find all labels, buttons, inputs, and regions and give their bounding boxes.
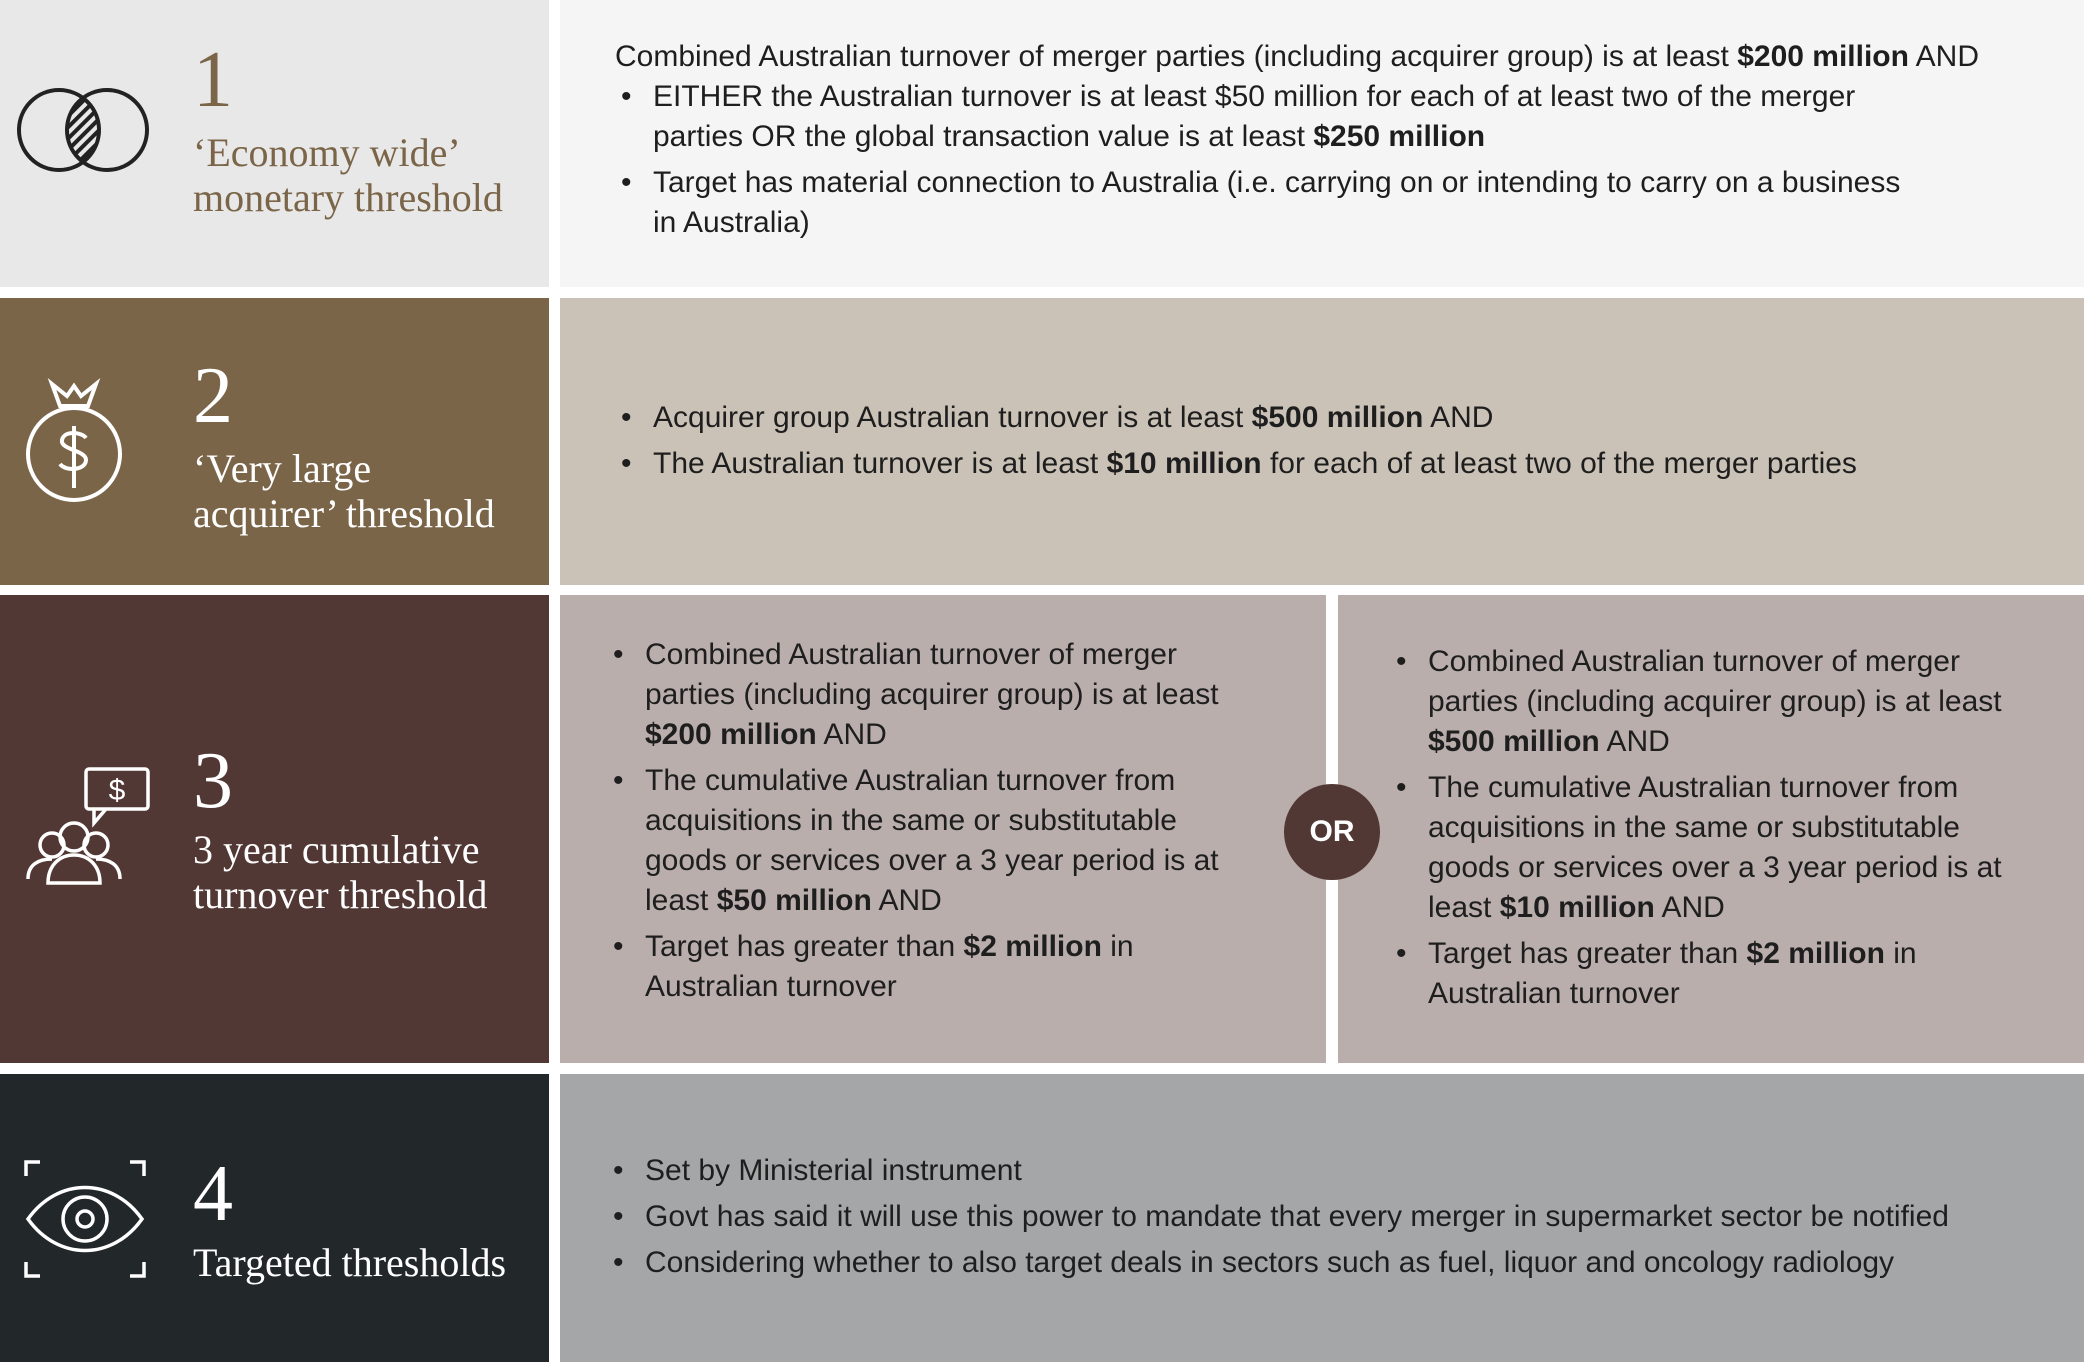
panel: row 4 right — [560, 1074, 2084, 1362]
text: row 4 points — [614, 1154, 1949, 1279]
text: row 2 criteria: The Australian turnover is at least $10 million for each of at least two of the merger parties — [653, 447, 1857, 480]
number 2: 2 — [193, 352, 233, 440]
text: option A criteria — [614, 638, 1219, 1003]
panel: row 1 left — [0, 0, 549, 287]
text: row 4 points: Considering whether to also target deals in sectors such as fuel, liquor and oncology radiology — [645, 1246, 1894, 1279]
heading 3: 3 year cumulative — [193, 827, 480, 872]
heading 4: Targeted thresholds — [193, 1240, 506, 1285]
icon: eye in frame — [24, 1160, 146, 1278]
text: option A criteria: The cumulative Australian turnover from acquisitions in the same or substitutable goods or services over a 3 year period is at least $50 million AND — [645, 764, 1219, 917]
text: row 1 criteria: EITHER the Australian turnover is at least $50 million for each of at least two of the merger parties OR the global transaction value is at least $250 million — [653, 80, 1855, 153]
text: option B criteria — [1397, 645, 2002, 1010]
text: row 1 criteria: Target has material connection to Australia (i.e. carrying on or intending to carry on a business in Australia) — [653, 166, 1900, 239]
heading 3 — [193, 827, 487, 917]
panel: row 3 left — [0, 595, 549, 1063]
panel: row 3 option B — [1338, 595, 2084, 1063]
text: row 1 criteria: Combined Australian turnover of merger parties (including acquirer group) is at least $200 million AND — [615, 40, 1979, 73]
panel: row 4 left — [0, 1074, 549, 1362]
number 3: 3 — [193, 737, 233, 825]
text: row 4 points: Govt has said it will use this power to mandate that every merger in supermarket sector be notified — [645, 1200, 1949, 1233]
icon: overlapping circles — [17, 88, 149, 172]
heading 3: turnover threshold — [193, 872, 487, 917]
OR badge — [1284, 784, 1380, 880]
icon: people with speech bubble — [26, 767, 150, 885]
OR badge: OR — [1310, 815, 1354, 848]
panel: row 2 left — [0, 298, 549, 585]
heading 2: ‘Very large — [193, 446, 371, 491]
heading 1 — [193, 130, 503, 220]
text: option B criteria: Combined Australian turnover of merger parties (including acquirer group) is at least $500 million AND — [1428, 645, 2002, 758]
heading 2: acquirer’ threshold — [193, 491, 495, 536]
heading 1: monetary threshold — [193, 175, 503, 220]
text: option A criteria: Combined Australian turnover of merger parties (including acquirer group) is at least $200 million AND — [645, 638, 1219, 751]
panel: row 2 right — [560, 298, 2084, 585]
number 4: 4 — [193, 1150, 233, 1238]
heading 1: ‘Economy wide’ — [193, 130, 461, 175]
text: row 1 criteria — [615, 40, 1979, 239]
text: row 2 criteria — [622, 401, 1857, 480]
panel: row 3 option A — [560, 595, 1326, 1063]
number 1: 1 — [193, 36, 233, 124]
text: row 2 criteria: Acquirer group Australian turnover is at least $500 million AND — [653, 401, 1493, 434]
heading 2 — [193, 446, 495, 536]
text: option B criteria: Target has greater than $2 million in Australian turnover — [1428, 937, 1917, 1010]
text: option A criteria: Target has greater than $2 million in Australian turnover — [645, 930, 1134, 1003]
text: option B criteria: The cumulative Australian turnover from acquisitions in the same or substitutable goods or services over a 3 year period is at least $10 million AND — [1428, 771, 2002, 924]
icon: money bag — [26, 378, 122, 502]
icon: people with speech bubble: $ — [109, 774, 126, 807]
text: row 4 points: Set by Ministerial instrument — [645, 1154, 1022, 1187]
panel: row 1 right — [560, 0, 2084, 287]
